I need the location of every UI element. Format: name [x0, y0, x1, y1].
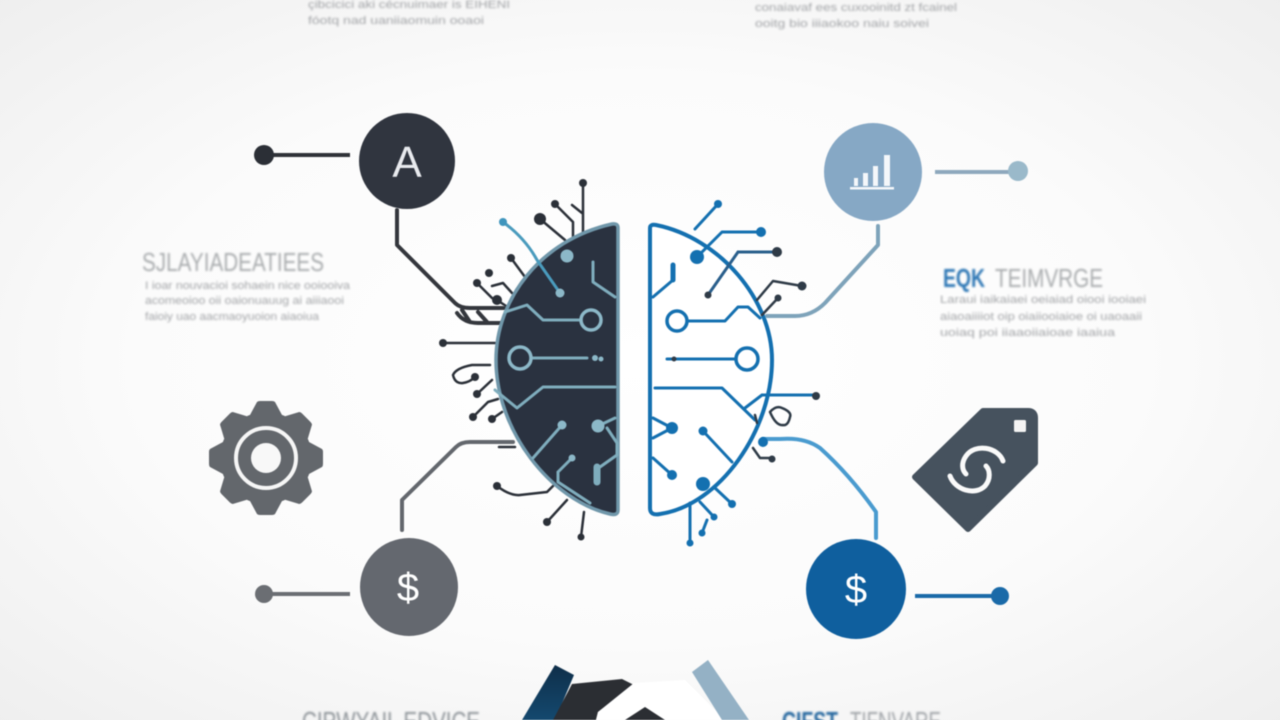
- text block: left feature: [142, 247, 351, 323]
- left inner nodes: [499, 218, 604, 462]
- right dark nodes: [672, 247, 820, 462]
- body copy: right feature: aiaoaiiiiot oip oiaiiooiaioe oi uaoaaii: [940, 311, 1142, 323]
- connector: bottom left circle to brain: [402, 442, 513, 530]
- body copy: left feature: acomeoioo oii oaionuauug ai aiiiaooi: [145, 295, 344, 307]
- left inner rings: [509, 310, 601, 369]
- body copy: right feature: uoiaq poi iiaaoiiaioae iaaiua: [940, 327, 1116, 339]
- text block: top left: [308, 0, 510, 27]
- node: bottom left dollar: $: [397, 566, 419, 610]
- body copy: left feature: I ioar nouvacioi sohaein nice ooiooiva: [145, 280, 351, 292]
- right hemisphere: blue circuit brain: [650, 200, 820, 546]
- left hemisphere body: [496, 224, 618, 515]
- right rings: [667, 311, 758, 370]
- node: bottom right dollar: [806, 539, 1009, 639]
- body copy: left feature: [145, 280, 351, 323]
- node: bottom left dollar: [255, 538, 458, 636]
- node: top left letter A: A: [392, 138, 422, 187]
- left inner traces: [495, 222, 617, 503]
- text block: top right: [755, 2, 957, 30]
- left outer nodes: [439, 179, 587, 540]
- connector: bottom right circle to brain: [763, 439, 876, 538]
- connector: top left circle to brain: [397, 210, 508, 323]
- right dark traces: [753, 281, 802, 458]
- right traces: [653, 204, 816, 543]
- icon: bar chart: [850, 155, 894, 190]
- node: top right bar chart: [824, 123, 1028, 221]
- node: bottom right dollar: $: [845, 568, 867, 612]
- node: top left letter A: [254, 113, 455, 209]
- icon: gear: [209, 401, 323, 515]
- text block: right feature: [940, 263, 1146, 339]
- heading: right feature: EQK: [943, 263, 985, 293]
- heading: bottom right: [782, 706, 941, 720]
- text block: top right: ooitg bio iiiaokoo naiu soivei: [755, 18, 929, 30]
- right hemisphere outline: [650, 225, 772, 514]
- left outer traces: [443, 183, 584, 537]
- body copy: right feature: Laraui iaikaiaei oeiaiad oiooi iooiaei: [940, 294, 1146, 306]
- right nodes: [666, 200, 768, 546]
- text block: top right: conaiavaf ees cuxooinitd zt fcainel: [755, 2, 957, 14]
- heading: right feature: [943, 263, 1103, 293]
- body copy: right feature: [940, 294, 1146, 339]
- icon: handshake fragment: [522, 660, 749, 720]
- body copy: left feature: faioiy uao aacmaoyuoion aiaoiua: [145, 311, 320, 323]
- left hemisphere: dark circuit brain: [439, 179, 618, 540]
- heading: left feature: SJLAYIADEATIEES: [142, 247, 324, 277]
- heading: right feature: TEIMVRGE: [995, 263, 1103, 293]
- text block: top left: fóotq nad uaniiaomuin ooaoi: [308, 15, 484, 27]
- icon: price tag: [915, 411, 1035, 529]
- connector: top right circle to brain: [767, 226, 878, 316]
